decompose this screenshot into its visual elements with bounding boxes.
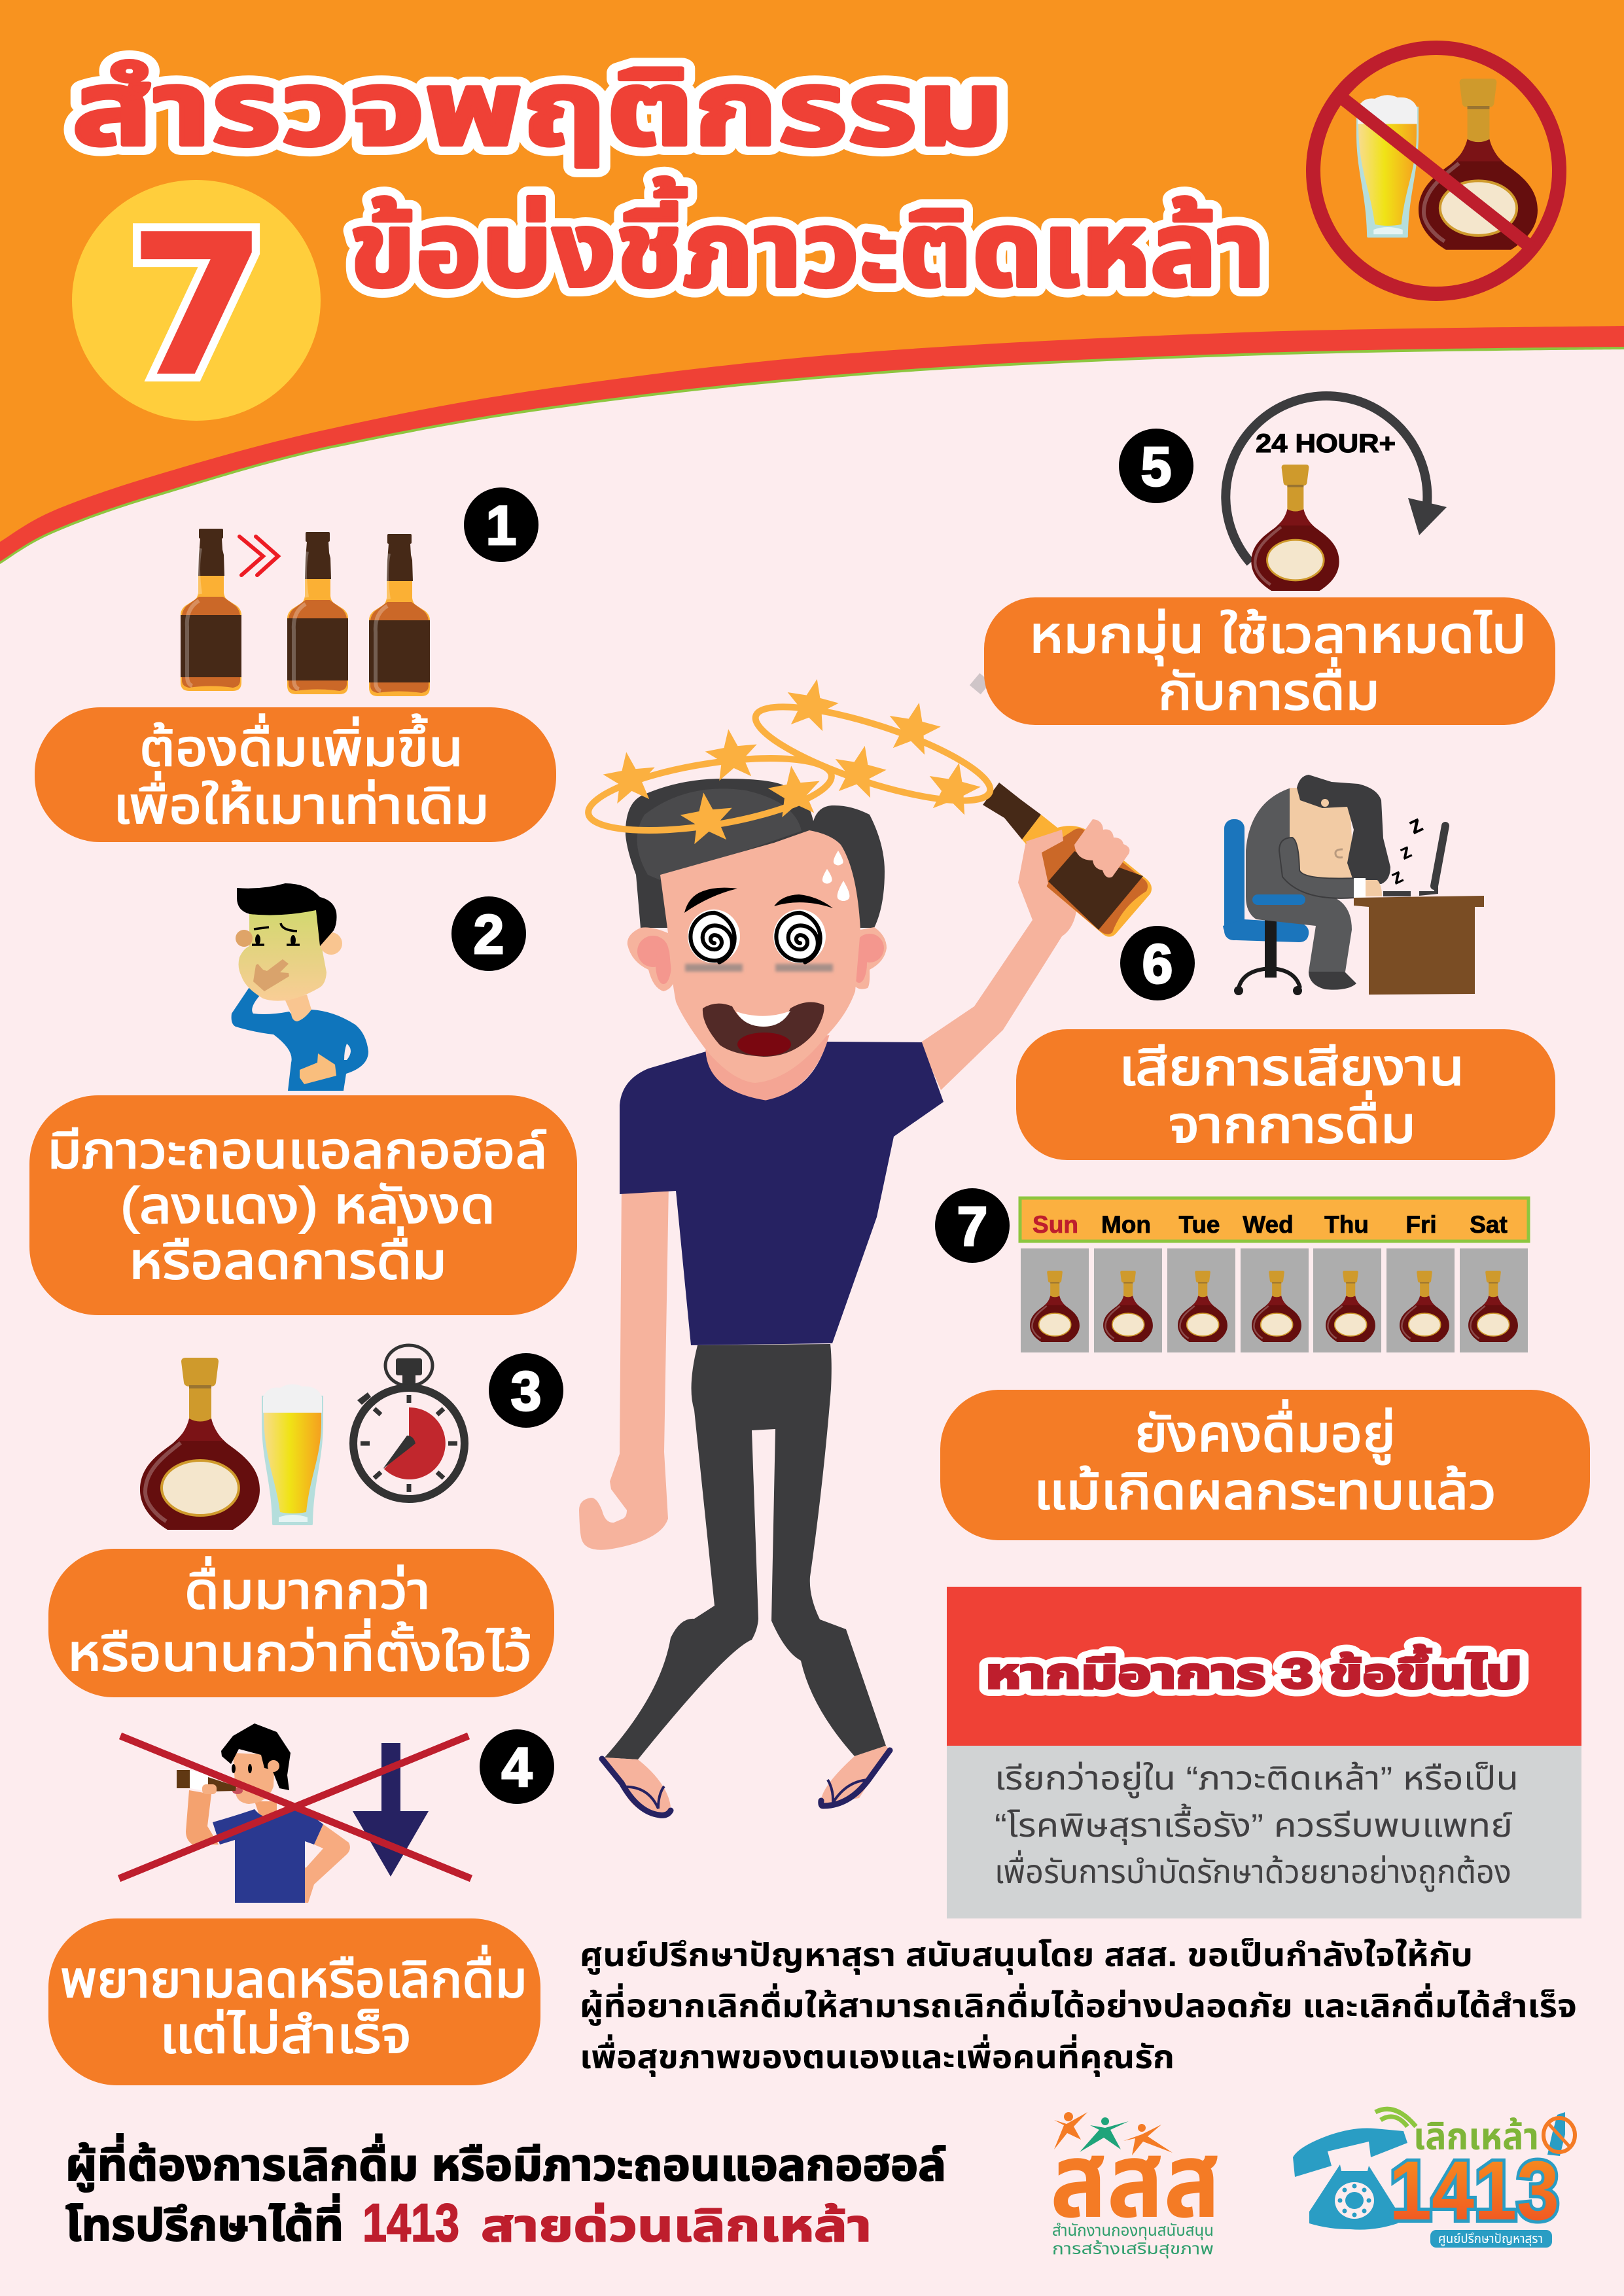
icon: stopwatch <box>353 1345 465 1499</box>
hotline message: 1413 <box>362 2193 459 2253</box>
pill 4: พยายามลดหรือเลิกดื่ม <box>60 1945 527 2008</box>
icon: 24 hour arrow <box>1226 396 1447 563</box>
left arm <box>579 1184 669 1550</box>
icon: beer glass <box>262 1384 323 1525</box>
calendar cells with bottles <box>1021 1248 1528 1352</box>
logo: hotline 1413 <box>1293 2109 1575 2248</box>
panel: sign 1 more drinks <box>35 487 556 842</box>
icon: flask <box>140 1358 260 1530</box>
pill 2: (ลงแดง) หลังงด <box>120 1176 495 1234</box>
pill 3 <box>48 1549 554 1697</box>
support message: เพื่อสุขภาพของตนเองและเพื่อคนที่คุณรัก <box>580 2034 1174 2077</box>
pill 1 <box>35 707 556 842</box>
callout body: เรียกว่าอยู่ใน “ภาวะติดเหล้า” หรือเป็น <box>995 1760 1519 1798</box>
logo: hotline 1413: 1413 <box>1389 2144 1559 2238</box>
bottle glint <box>970 673 991 694</box>
pill 7 <box>940 1390 1590 1540</box>
pill 4: แต่ไม่สำเร็จ <box>160 2006 412 2064</box>
logo: ThaiHealth: สำนักงานกองทุนสนับสนุน <box>1052 2221 1214 2240</box>
number 3: 3 <box>511 1360 541 1422</box>
dizzy star rings <box>584 674 998 845</box>
logo: ThaiHealth: การสร้างเสริมสุขภาพ <box>1052 2240 1214 2259</box>
callout body <box>995 1760 1519 1892</box>
calendar header: Mon <box>1101 1211 1151 1238</box>
ears <box>627 927 887 991</box>
pill 2 <box>29 1095 577 1315</box>
pill 1: ต้องดื่มเพิ่มขึ้น <box>139 714 463 777</box>
panel: sign 6 neglect work <box>1016 775 1555 1160</box>
neck <box>707 1037 827 1099</box>
number 6: 6 <box>1142 933 1173 995</box>
title badge: number 7: 7 <box>128 193 267 419</box>
right arm with hand <box>920 830 1086 1090</box>
pill 5: กับการดื่ม <box>1158 658 1380 720</box>
number 4: 4 <box>502 1737 533 1798</box>
icon: down arrow <box>353 1743 429 1877</box>
hotline message <box>65 2134 946 2253</box>
title badge: number 7 <box>72 180 321 421</box>
pill 6: เสียการเสียงาน <box>1119 1038 1464 1096</box>
shirt <box>620 1042 944 1345</box>
logo: hotline 1413: ศูนย์ปรึกษาปัญหาสุรา <box>1438 2232 1543 2247</box>
sweat drops <box>822 851 849 901</box>
icon: flask <box>1251 465 1339 591</box>
panel: sign 2 withdrawal <box>29 883 577 1315</box>
calendar header <box>1020 1198 1528 1241</box>
panel: sign 4 failed to quit <box>48 1723 554 2085</box>
calendar header: Fri <box>1405 1211 1437 1238</box>
pill 7: แม้เกิดผลกระทบแล้ว <box>1034 1462 1496 1520</box>
pill 5: หมกมุ่น ใช้เวลาหมดไป <box>1029 606 1527 666</box>
trousers <box>605 1344 886 1759</box>
support message <box>580 1937 1577 2077</box>
pill 6: จากการดื่ม <box>1169 1091 1416 1154</box>
number 3 <box>489 1353 563 1428</box>
dizzy eyes <box>688 910 826 963</box>
icon: no alcohol sign <box>1313 48 1559 294</box>
face <box>660 830 860 1059</box>
number 2 <box>451 896 526 971</box>
support message: ผู้ที่อยากเลิกดื่มให้สามารถเลิกดื่มได้อย่างปลอดภัย และเลิกดื่มได้สำเร็จ <box>580 1983 1577 2026</box>
logo: ThaiHealth: สสส <box>1050 2122 1220 2239</box>
number 7: 7 <box>957 1195 987 1257</box>
number 6 <box>1120 926 1195 1000</box>
calendar header: Thu <box>1324 1211 1369 1238</box>
pill 3: ดื่มมากกว่า <box>185 1557 431 1619</box>
right foot <box>821 1746 890 1806</box>
pill 5 <box>984 597 1555 725</box>
hotline message: โทรปรึกษาได้ที่ <box>65 2194 344 2250</box>
left foot <box>602 1757 671 1817</box>
number 7 <box>935 1188 1010 1263</box>
hair <box>626 779 885 928</box>
icon: nauseous man <box>232 883 368 1091</box>
title line 1: สำรวจพฤติกรรม <box>72 50 1004 167</box>
hotline message: ผู้ที่ต้องการเลิกดื่ม หรือมีภาวะถอนแอลกอฮอล์ <box>65 2134 946 2192</box>
title line 1: สำรวจพฤติกรรม <box>72 50 1004 167</box>
logo: hotline 1413: เลิกเหล้า <box>1413 2115 1539 2158</box>
pill 3: หรือนานกว่าที่ตั้งใจไว้ <box>67 1619 532 1682</box>
pill 7: ยังคงดื่มอยู่ <box>1135 1400 1396 1465</box>
title badge: number 7: 7 <box>128 193 267 419</box>
icon: three bottles <box>181 529 430 696</box>
callout body: “โรคพิษสุราเรื้อรัง” ควรรีบพบแพทย์ <box>995 1803 1513 1845</box>
brows <box>684 888 833 913</box>
title line 2: ข้อบ่งชี้ภาวะติดเหล้า <box>349 177 1265 308</box>
support message: ศูนย์ปรึกษาปัญหาสุรา สนับสนุนโดย สสส. ขอเป็นกำลังใจให้กับ <box>580 1937 1473 1975</box>
number 1 <box>464 487 538 562</box>
hotline message: สายด่วนเลิกเหล้า <box>481 2201 872 2251</box>
icon: red cross <box>119 1736 471 1879</box>
title line 2: ข้อบ่งชี้ภาวะติดเหล้า <box>349 177 1265 308</box>
icon: sleeping office worker: z <box>1396 838 1415 864</box>
panel: sign 3 more than intended <box>48 1345 563 1697</box>
number 5 <box>1119 429 1193 503</box>
mouth <box>703 1002 824 1057</box>
calendar header: Wed <box>1243 1211 1294 1238</box>
pill 4 <box>48 1918 540 2085</box>
pill 2: มีภาวะถอนแอลกอฮอล์ <box>47 1122 548 1179</box>
calendar header: Sun <box>1033 1211 1078 1238</box>
pill 1: เพื่อให้เมาเท่าเดิม <box>113 771 489 834</box>
panel: sign 7 keeps drinking <box>935 1188 1590 1540</box>
number 1: 1 <box>486 495 516 556</box>
number 2: 2 <box>474 904 504 965</box>
callout heading <box>985 1644 1522 1697</box>
number 5: 5 <box>1141 436 1171 497</box>
number 4 <box>480 1729 554 1804</box>
central figure: dizzy man <box>579 673 1152 1817</box>
callout heading: หากมีอาการ 3 ข้อขึ้นไป <box>985 1644 1522 1697</box>
icon: sleeping office worker: z <box>1404 810 1427 840</box>
pill 2: หรือลดการดื่ม <box>129 1227 447 1290</box>
header band <box>0 0 1624 564</box>
label 24 hour: 24 HOUR+ <box>1256 429 1396 458</box>
callout body: เพื่อรับการบำบัดรักษาด้วยยาอย่างถูกต้อง <box>995 1850 1511 1892</box>
calendar header: Tue <box>1178 1211 1220 1238</box>
eye bags <box>685 964 833 972</box>
bottle in hand <box>983 783 1152 937</box>
pill 6 <box>1016 1029 1555 1160</box>
calendar header: Sat <box>1470 1211 1508 1238</box>
icon: sleeping office worker <box>1223 775 1484 995</box>
callout: three or more symptoms <box>947 1587 1581 1918</box>
icon: drinking man <box>177 1723 350 1903</box>
icon: sleeping office worker: z <box>1387 863 1407 889</box>
panel: sign 5 preoccupied <box>984 396 1555 725</box>
callout heading: หากมีอาการ 3 ข้อขึ้นไป <box>985 1644 1522 1697</box>
